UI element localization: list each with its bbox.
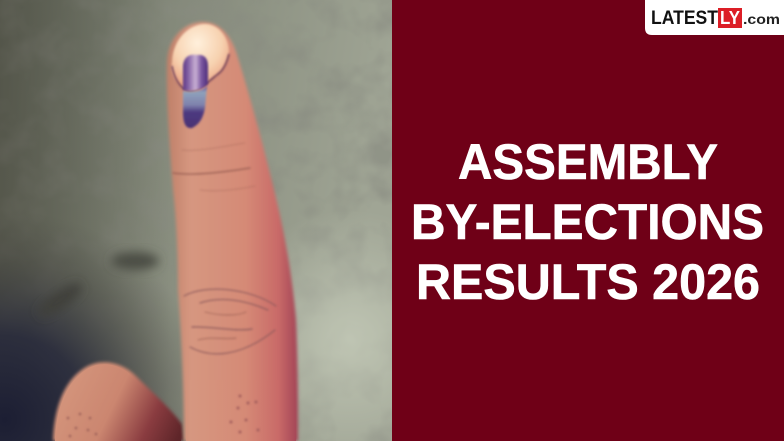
title: Assembly By-Elections Results 2026	[411, 134, 764, 310]
index finger	[167, 22, 298, 441]
panel: maroon title panel	[392, 0, 784, 441]
finger creases	[173, 143, 276, 354]
title line 1: ASSEMBLY	[458, 134, 718, 190]
finger pigment marks	[230, 394, 260, 434]
logo word LY: LY	[720, 8, 740, 28]
logo: LatestLY.com	[645, 0, 784, 35]
title line 3: RESULTS 2026	[416, 254, 760, 310]
fingernail	[171, 24, 229, 91]
voting ink mark	[183, 55, 208, 128]
logo red box	[718, 8, 742, 28]
title line 2: BY-ELECTIONS	[411, 194, 764, 250]
logo word .com: .com	[743, 11, 780, 27]
logo word LATEST: LATEST	[651, 8, 718, 29]
photo background wall	[0, 0, 392, 441]
panel: photo of inked finger	[0, 0, 392, 441]
thumb	[53, 362, 184, 441]
